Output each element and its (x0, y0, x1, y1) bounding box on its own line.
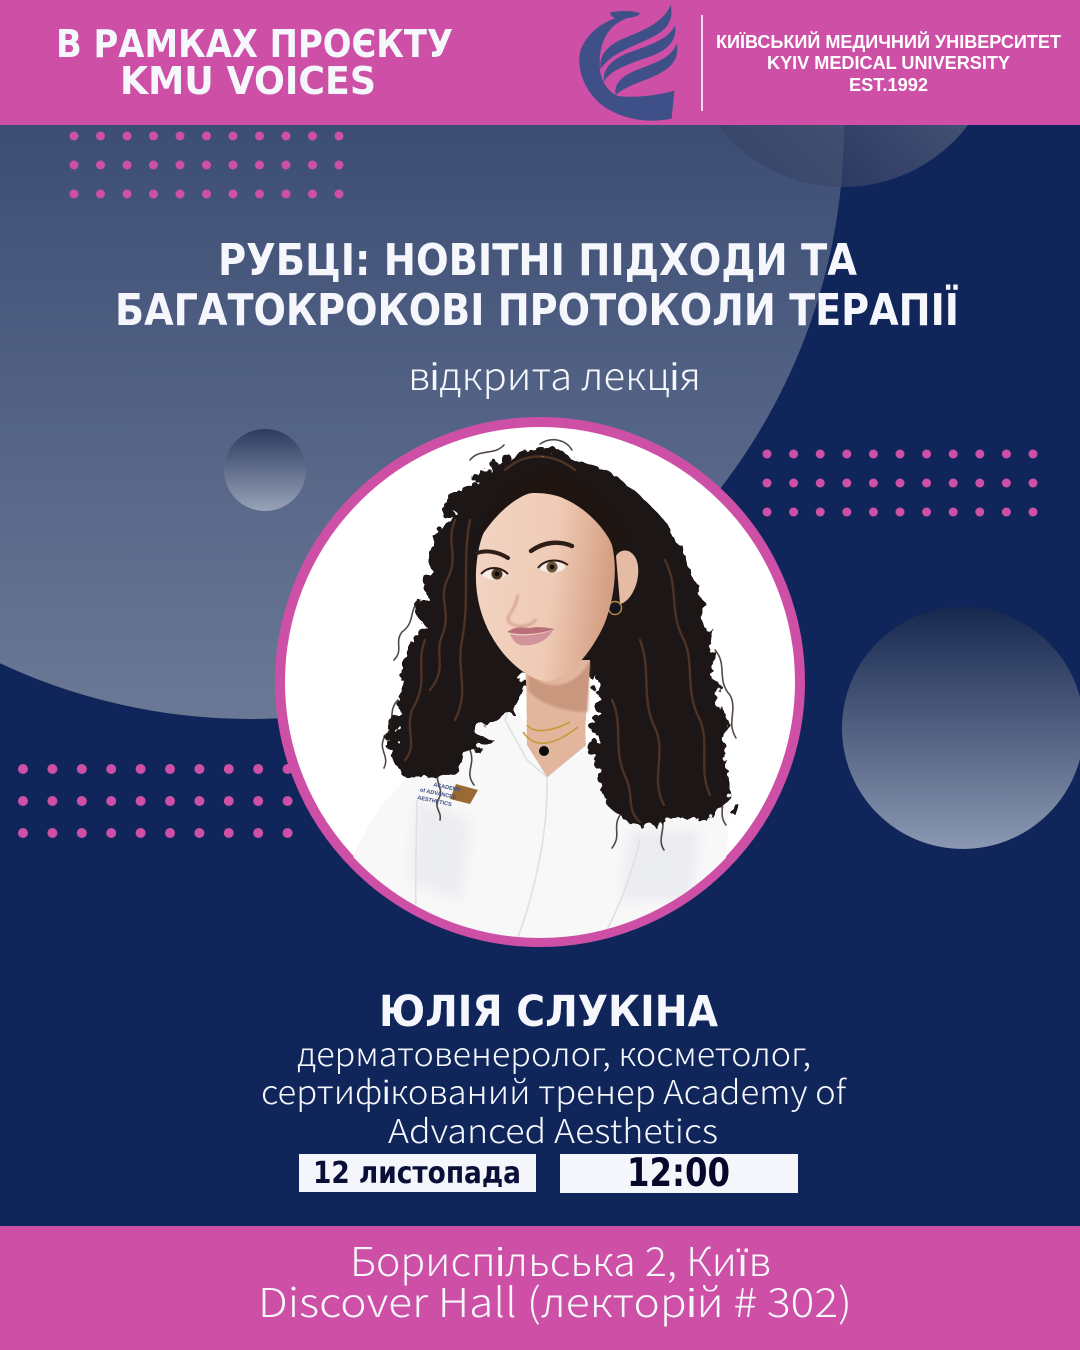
footer band (0, 1226, 1080, 1350)
dot pattern: top left (70, 132, 344, 198)
speaker role: дерматовенеролог, косметолог, (297, 1028, 811, 1076)
ear (616, 551, 638, 604)
shirt shading (410, 800, 700, 900)
large background circle (0, 0, 844, 719)
speaker portrait (280, 422, 800, 960)
hair wisps (382, 440, 736, 850)
shirt (353, 856, 726, 938)
hair (387, 445, 728, 817)
speaker role: Advanced Aesthetics (388, 1105, 718, 1153)
title: БАГАТОКРОКОВІ ПРОТОКОЛИ ТЕРАПІЇ (115, 283, 959, 336)
icon: university logo (579, 5, 677, 121)
embroidery: AESTHETICS (417, 795, 452, 808)
hair over forehead (483, 493, 610, 541)
header: university name (716, 31, 1061, 95)
header: project label: В РАМКАХ ПРОЄКТУ (56, 22, 453, 66)
neck shadow (528, 660, 590, 712)
nose (508, 595, 536, 626)
dot pattern: lower left (18, 764, 293, 838)
embroidery (417, 782, 478, 806)
title: РУБЦІ: НОВІТНІ ПІДХОДИ ТА (218, 235, 857, 286)
embroidery: ACADEMY (433, 782, 462, 794)
title (115, 235, 959, 336)
eyebrows (477, 543, 572, 558)
header divider (701, 15, 703, 111)
header: project label (56, 22, 453, 103)
time box (560, 1151, 798, 1196)
header: project label: KMU VOICES (120, 59, 376, 103)
speaker role (261, 1028, 847, 1153)
header: university name: KYIV MEDICAL UNIVERSITY (767, 53, 1010, 73)
earring (608, 602, 622, 614)
small gradient circle (224, 429, 306, 511)
dot pattern: right (762, 450, 1038, 516)
top background circle (718, 125, 968, 187)
venue address: Discover Hall (лекторій # 302) (258, 1271, 852, 1329)
eyes (481, 560, 568, 580)
header: university name: КИЇВСЬКИЙ МЕДИЧНИЙ УНІВЕРСИТЕТ (716, 31, 1061, 52)
venue address: Бориспільська 2, Київ (350, 1230, 771, 1288)
speaker name: ЮЛІЯ СЛУКІНА (379, 987, 719, 1037)
header: university name: EST.1992 (849, 75, 928, 95)
lips (507, 627, 555, 645)
right gradient circle (842, 607, 1080, 849)
face (476, 493, 615, 681)
subtitle: відкрита лекція (408, 346, 701, 401)
curl highlights (405, 456, 710, 822)
embroidery: of ADVANCED (419, 787, 457, 801)
pendant (539, 746, 549, 756)
portrait ring (280, 422, 800, 942)
neck (524, 660, 590, 777)
speaker role: сертифікований тренер Academy of (261, 1066, 847, 1114)
time box: 12:00 (627, 1151, 730, 1196)
shirt folds (416, 694, 640, 945)
necklace (523, 722, 578, 743)
date box: 12 листопада (313, 1156, 521, 1191)
portrait illustration (352, 440, 736, 960)
venue address (258, 1230, 852, 1329)
header band (0, 0, 1080, 125)
